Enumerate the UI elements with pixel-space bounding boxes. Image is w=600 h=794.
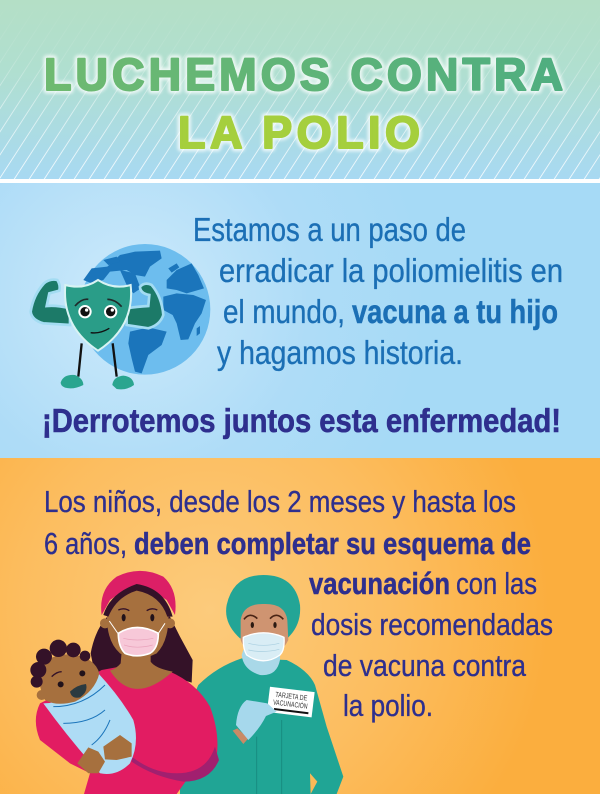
baby head: [39, 654, 99, 704]
mother face: [107, 588, 169, 658]
worker gloved hand: [233, 728, 248, 744]
panel: orange message background: [0, 458, 600, 794]
title: LUCHEMOS CONTRA: [44, 49, 563, 100]
panel: title banner background: [0, 0, 600, 179]
text block: intro message: el mundo,: [223, 293, 345, 330]
illustration: health worker: [180, 575, 343, 794]
text block: intro message: y hagamos historia.: [217, 334, 463, 371]
vaccination card: TARJETA DE: [275, 690, 308, 703]
vaccination card: VACUNACIÓN: [273, 698, 308, 711]
worker collar: [242, 650, 280, 675]
title: LA POLIO: [178, 107, 420, 158]
baby curly hair: [30, 640, 90, 688]
illustration: mother and baby: [30, 571, 219, 794]
title: LA POLIO: [178, 107, 420, 158]
mother headscarf: [101, 571, 176, 615]
text block: vaccination message: Los niños, desde los 2 meses y hasta los: [44, 484, 516, 519]
mother mask: [118, 627, 158, 656]
mascot face: [75, 299, 122, 333]
title: LUCHEMOS CONTRA: [44, 49, 563, 100]
worker gown: [180, 658, 343, 794]
text block: vaccination message: vacunación: [309, 566, 450, 601]
text block: vaccination message: con las: [456, 566, 537, 601]
icon: shield mascot: [31, 280, 163, 389]
baby blanket: [43, 673, 136, 774]
text block: vaccination message: 6 años,: [44, 526, 127, 561]
mother neck: [110, 652, 173, 689]
mascot arms: [31, 280, 163, 328]
worker mask: [243, 633, 284, 661]
icon: globe: [80, 244, 210, 375]
worker cap: [226, 575, 300, 638]
mascot shield body: [65, 280, 131, 351]
mother body: [36, 667, 217, 794]
text block: intro message: [193, 211, 563, 371]
text block: intro message: erradicar la poliomielitis en: [219, 252, 563, 289]
title: [44, 49, 563, 158]
panel: blue message background: [0, 183, 600, 458]
mother hands: [77, 747, 105, 773]
text block: intro message: vacuna a tu hijo: [352, 293, 558, 330]
mascot legs and feet: [61, 343, 134, 389]
text block: vaccination message: [44, 484, 553, 723]
text block: vaccination message: de vacuna contra: [323, 648, 527, 683]
mother hair: [91, 617, 193, 683]
worker face: [241, 604, 288, 657]
text block: vaccination message: la polio.: [343, 688, 433, 723]
text block: vaccination message: dosis recomendadas: [311, 607, 553, 642]
text block: intro message: Estamos a un paso de: [193, 211, 466, 248]
vaccination card: [267, 687, 315, 717]
